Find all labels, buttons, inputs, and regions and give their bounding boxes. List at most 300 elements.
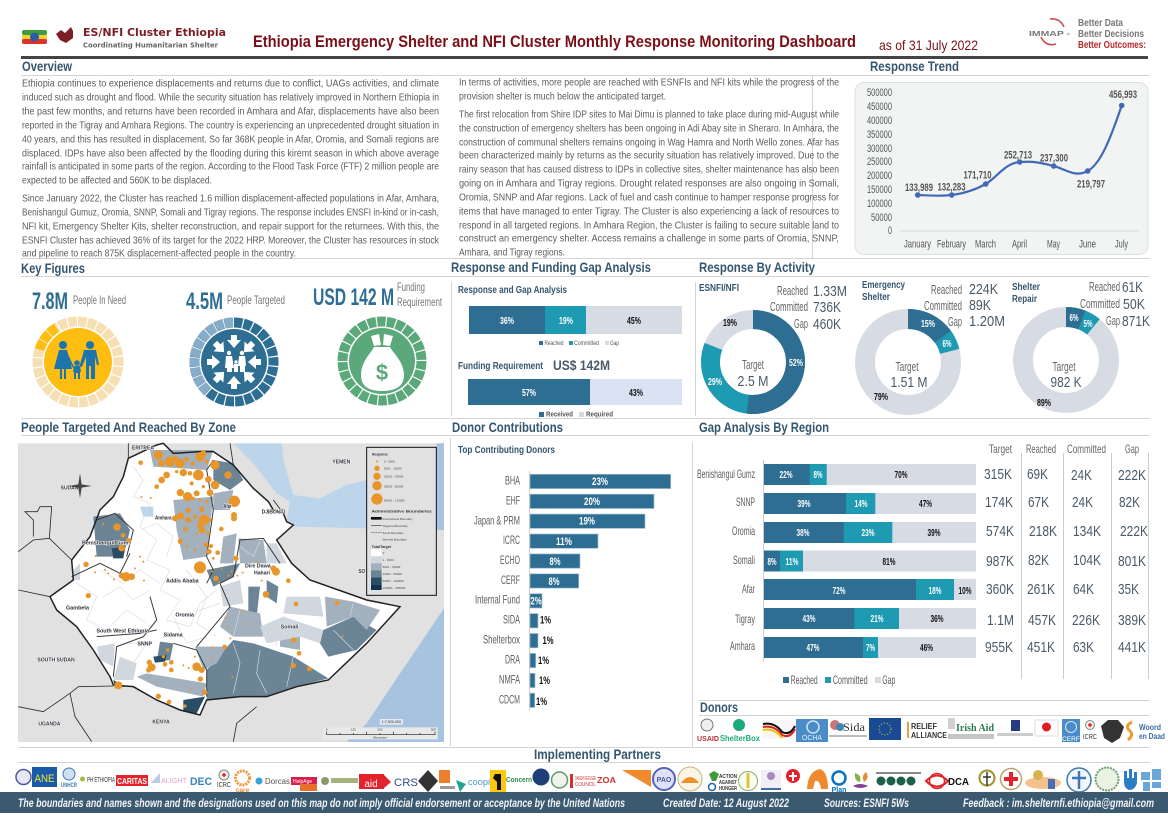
bar chart: top contributing donors: 11%: [556, 536, 572, 548]
map place labels: South West Ethiopia: [96, 629, 150, 635]
map place labels: SOUTH SUDAN: [37, 658, 75, 664]
logo: Sida: Sida: [843, 720, 866, 734]
key figure: people targeted: 4.5M: [186, 288, 223, 315]
table: regional values: 315K: [984, 466, 1012, 483]
stacked bar chart: gap analysis by region: 7%: [866, 643, 875, 654]
table: regional values: 574K: [986, 523, 1014, 540]
donut: Shelter Repair: Reached: [1089, 280, 1120, 294]
donut: Emergency Shelter: 6%: [942, 339, 952, 350]
map legend: TotalTarget: [372, 545, 392, 549]
logo: Plan: [832, 772, 846, 794]
donut: ESNFI/NFI: 19%: [723, 318, 737, 329]
line chart: response trend: July: [1115, 238, 1128, 250]
stacked bar chart: gap analysis by region: 22%: [780, 470, 793, 481]
chart: funding requirement: US$ 142M: [553, 357, 610, 373]
donut: Emergency Shelter: 89K: [969, 297, 991, 314]
logo: USAID: [697, 719, 719, 743]
stacked bar chart: gap analysis by region: [697, 460, 976, 687]
heading: Response Trend: Response Trend: [870, 58, 959, 74]
logo: Alight: ALIGHT: [161, 778, 188, 785]
donut: ESNFI/NFI: 460K: [813, 316, 841, 333]
table: regional values: 63K: [1073, 639, 1094, 656]
logo: Plan: Plan: [832, 787, 846, 794]
stacked bar chart: gap analysis by region: Tigray: [735, 612, 755, 626]
chart: response and gap analysis: Response and Gap Analysis: [458, 285, 567, 296]
logo: diamond: [418, 770, 438, 792]
logo: PAO: [653, 768, 675, 790]
heading: Donors: Donors: [700, 699, 738, 715]
logo: Japan: [1035, 720, 1058, 736]
table: regional values: 82K: [1119, 494, 1140, 511]
line chart: response trend: January: [904, 238, 931, 250]
footer bar: Sources: ESNFI 5Ws: [824, 798, 909, 810]
chart: response and gap analysis: 36%: [500, 316, 514, 327]
chart legend: [783, 673, 895, 687]
line chart: response trend: 200000: [867, 170, 892, 182]
bar chart: top contributing donors: Top Contributing Donors: [458, 445, 555, 456]
donut: Emergency Shelter: 15%: [921, 319, 935, 330]
map place labels: DJIBOUTI: [262, 510, 285, 516]
table: regional values: 35K: [1118, 581, 1139, 598]
donut: ESNFI/NFI: 29%: [708, 377, 722, 388]
donut: Shelter Repair: [1012, 279, 1150, 409]
overview text column 1: NFI kit, Emergency Shelter Kits, shelter reconstruction, and repair support for the returnees. With this, the: [22, 220, 439, 232]
bar chart: top contributing donors: 20%: [584, 496, 600, 508]
map place labels: Oromia: [175, 613, 195, 619]
bar chart: top contributing donors: 23%: [592, 476, 608, 488]
map boundaries: [77, 467, 353, 693]
heading: Implementing Partners: Implementing Partners: [534, 746, 661, 762]
chart legend: Committed: [833, 673, 868, 687]
donut: ESNFI/NFI: ESNFI/NFI: [699, 283, 739, 294]
line chart: response trend: 500000: [867, 87, 892, 99]
logo: Woord en Daad: [1127, 722, 1165, 741]
table: regional values: Committed: [1067, 442, 1106, 456]
logo: CERF: CERF: [1062, 736, 1080, 743]
icon: Ethiopia flag: [22, 30, 47, 44]
logo: iMMAP: Better Decisions: [1078, 29, 1144, 40]
table: regional values: 222K: [1118, 467, 1146, 484]
logo: partner globe: [16, 770, 31, 784]
map place labels: Gambela: [66, 606, 90, 612]
donut: Shelter Repair: Repair: [1012, 294, 1037, 305]
line chart: response trend: 171,710: [964, 170, 992, 182]
map response dots: [83, 450, 344, 708]
logo: iMMAP: IMMAP -: [1029, 31, 1071, 38]
logo: Save the Children: [786, 769, 800, 783]
map place labels: Dire Dawa: [245, 564, 271, 570]
logo: Mercy aid: [359, 774, 391, 790]
logo: UNHCR: UNHCR: [61, 783, 77, 789]
overview text column 2: rainy season that has caused distress to IDPs in collective sites, shelter maintenance has also been: [459, 164, 839, 176]
stacked bar chart: gap analysis by region: Afar: [742, 582, 755, 596]
donut: ESNFI/NFI: Reached: [777, 284, 808, 298]
logo: Norway ministry: [997, 720, 1033, 736]
line chart: response trend: 100000: [867, 198, 892, 210]
logo: ASTED: [532, 768, 550, 786]
logo: orange arch: [807, 769, 828, 789]
chart: response and gap analysis: 45%: [627, 316, 641, 327]
heading: People Targeted And Reached By Zone: People Targeted And Reached By Zone: [21, 419, 236, 435]
donut: Emergency Shelter: Emergency: [862, 280, 905, 291]
logo: Relief Alliance: [907, 722, 948, 740]
chart: response and gap analysis: 19%: [559, 316, 573, 327]
overview text column 1: the past few months, and returns have been recorded in Amhara and Afar, displacements have also been: [22, 106, 439, 118]
overview text column 1: ESNFI Cluster has achieved 36% of its target for the 2022 HRP. Moreover, the Cluster has resources in stock: [22, 234, 440, 246]
table: regional values: 457K: [1028, 612, 1056, 629]
logo: orange triangle: [622, 770, 651, 787]
logo: USAID: USAID: [697, 736, 719, 743]
map legend: 15001 - 50000: [383, 572, 402, 576]
table: regional values: Gap: [1125, 442, 1139, 456]
logo: European Union: [869, 718, 901, 740]
line chart: response trend: February: [937, 238, 966, 250]
logo: ShelterBox: [720, 719, 761, 743]
stacked bar chart: gap analysis by region: 18%: [928, 586, 942, 597]
overview text column 1: expected to be affected and 560K to be displaced.: [22, 174, 212, 186]
line chart: response trend: June: [1079, 238, 1096, 250]
overview text column 1: Since January 2022, the Cluster has reached 1.6 million displacement-affected populations in Afar, Amhara,: [22, 192, 439, 204]
map place labels: Hahari: [254, 571, 270, 577]
footer bar: Created Date: 12 August 2022: [663, 798, 789, 810]
table: regional values: 389K: [1118, 612, 1146, 629]
table: regional values: 218K: [1029, 523, 1057, 540]
map sea areas: [233, 443, 444, 742]
bar chart: top contributing donors: NMFA: [499, 672, 520, 686]
icon: people targeted ring: [178, 306, 290, 418]
line chart: response trend: 150000: [867, 184, 892, 196]
donut: Shelter Repair: 982 K: [1050, 374, 1082, 391]
map place labels: Addis Ababa: [166, 579, 199, 585]
donut: ESNFI/NFI: 1.33M: [813, 283, 847, 300]
line chart: response trend: 450000: [867, 101, 892, 113]
logo: UNHCR: [61, 768, 77, 789]
logo: orange partner group: [1025, 770, 1061, 789]
table: regional values: 222K: [1120, 523, 1148, 540]
chart: response and gap analysis: Gap: [610, 341, 620, 347]
map place labels: [37, 446, 366, 728]
logo: dark green circles: [876, 772, 921, 786]
overview text column 2: going on in Amhara and Tigray regions. Drought related responses are also ongoing in Somali,: [459, 178, 839, 190]
map scale bar: 125: [351, 728, 356, 732]
icon: money bag ring: $: [376, 360, 388, 385]
logo: OCHA: [796, 719, 828, 742]
map legend: 0 - 5000: [384, 460, 395, 464]
logo: PH Ethiopia: PH ETHIOPIA: [87, 777, 115, 784]
donut: Shelter Repair: 50K: [1123, 296, 1145, 313]
key figure: people in need: People In Need: [73, 293, 126, 307]
map legend: 0: [383, 551, 385, 555]
logo: ICRC partner: [217, 770, 231, 789]
table: regional values: 451K: [1027, 639, 1055, 656]
bar chart: top contributing donors: 19%: [579, 516, 595, 528]
logo: HelpAge: HelpAge: [293, 779, 312, 785]
cluster name: [83, 26, 226, 50]
overview text column 1: induced such as drought and flood. While the security situation has relatively improved in Northern Ethiopia in: [22, 92, 439, 104]
heading: Key Figures: Key Figures: [21, 260, 85, 276]
stacked bar chart: gap analysis by region: 8%: [814, 470, 823, 481]
donut: Emergency Shelter: Reached: [931, 283, 962, 297]
map legend: 100001 - 265000: [383, 586, 406, 590]
map legend: Zonal Boundary: [383, 531, 404, 535]
donut: Shelter Repair: Gap: [1106, 314, 1120, 328]
key figure: people targeted: People Targeted: [227, 293, 285, 307]
logo: DRC: COUNCIL: [575, 782, 596, 788]
heading: Overview: Overview: [22, 58, 72, 74]
chart: response and gap analysis: Committed: [574, 341, 599, 347]
logo: purple partner: [761, 770, 781, 790]
map place labels: Benishangul Gum.: [82, 541, 130, 547]
table: regional values: 24K: [1072, 494, 1093, 511]
map place labels: Sidama: [164, 633, 183, 639]
logo: ANE: ANE: [34, 773, 54, 785]
stacked bar chart: gap analysis by region: 38%: [796, 528, 810, 539]
overview text column 2: Oromia, SNNP and Afar regions. Lack of fuel and cash continue to hamper response progress for: [459, 192, 839, 204]
logo: Care: [236, 771, 250, 794]
overview text column 2: [459, 76, 839, 258]
donut: ESNFI/NFI: Target: [742, 357, 764, 372]
logo: Concern: Concern: [506, 777, 532, 784]
table: regional values: 104K: [1073, 552, 1101, 569]
chart: funding requirement: [458, 357, 682, 418]
logo: Relief Alliance: RELIEF: [911, 722, 937, 731]
donut: Emergency Shelter: Committed: [924, 299, 962, 313]
bar chart: top contributing donors: ICRC: [503, 533, 520, 547]
donut: ESNFI/NFI: 2.5 M: [738, 373, 768, 390]
donut: ESNFI/NFI: 52%: [789, 358, 803, 369]
logo: IRC: [490, 770, 506, 794]
map legend: 5001 - 15000: [384, 467, 402, 471]
date: as of 31 July 2022: [879, 37, 978, 53]
overview text column 2: Amhara, and Tigray regions.: [459, 246, 565, 258]
stacked bar chart: gap analysis by region: 39%: [928, 528, 941, 539]
donut: Shelter Repair: 871K: [1122, 313, 1150, 330]
heading: Donor Contributions: Donor Contributions: [452, 419, 563, 435]
donut: ESNFI/NFI: 736K: [813, 299, 841, 316]
map legend: Response: [372, 453, 388, 457]
map scale bar: Kilometers: [373, 736, 388, 740]
bar chart: top contributing donors: 1%: [542, 635, 554, 647]
chart: funding requirement: 43%: [629, 388, 643, 399]
bar chart: top contributing donors: 8%: [548, 576, 560, 588]
stacked bar chart: gap analysis by region: 14%: [854, 499, 868, 510]
map place labels: SUDAN: [61, 486, 78, 492]
stacked bar chart: gap analysis by region: Benishangul Gumz: [697, 467, 755, 481]
icon: family in yellow ring: [27, 311, 129, 413]
logo: Mercy aid: aid: [364, 779, 378, 790]
donut: Shelter Repair: 5%: [1084, 319, 1093, 330]
logo: DEC: DEC: [190, 776, 212, 788]
overview text column 2: construct an emergency shelter. Access remains a challenge in some parts of Oromia, SNNP,: [459, 232, 839, 244]
bar chart: top contributing donors: SIDA: [503, 612, 520, 626]
donut: Shelter Repair: 89%: [1037, 398, 1051, 409]
map legend: 50001 - 100000: [383, 579, 404, 583]
map place labels: UGANDA: [38, 722, 60, 728]
overview text column 1: reported in the Tigray and Amhara Regions. The country is experiencing an unprecedented drought situation in: [22, 120, 439, 132]
logo: red cross: [1000, 768, 1022, 790]
logo: green partner: [321, 777, 358, 785]
map place labels: Somali: [281, 625, 299, 631]
icon: money bag ring: [342, 322, 422, 400]
map scale bar: 250: [378, 728, 383, 732]
donut: ESNFI/NFI: [699, 283, 847, 404]
bar chart: top contributing donors: Japan & PRM: [474, 514, 520, 528]
stacked bar chart: gap analysis by region: SNNP: [736, 495, 755, 509]
table: regional values: 69K: [1027, 466, 1048, 483]
logo: ICRC: [1083, 720, 1097, 741]
stacked bar chart: gap analysis by region: Somali: [733, 553, 755, 567]
logo: Caritas: CARITAS: [117, 776, 147, 786]
donut: Emergency Shelter: Gap: [948, 315, 962, 329]
logo: German cooperation: [762, 720, 795, 739]
map legend: [367, 447, 436, 595]
table: regional values: 82K: [1028, 552, 1049, 569]
logo: DCA: DCA: [948, 777, 969, 788]
stacked bar chart: gap analysis by region: Oromia: [732, 524, 755, 538]
overview text column 1: Ethiopia continues to experience displacements and returns due to conflict, UAGs activities, and climate: [22, 78, 439, 90]
logo: CERF: [1062, 719, 1080, 743]
overview text column 2: In terms of activities, more people are reached with ESNFIs and NFI kits while the progress of the: [459, 76, 839, 88]
logo: leaves: [853, 772, 868, 788]
stacked bar chart: gap analysis by region: 72%: [832, 586, 846, 597]
donut: Emergency Shelter: Shelter: [862, 292, 890, 303]
map place labels: SNNP: [137, 642, 152, 648]
implementing partner logos: [16, 767, 1161, 794]
map scale bar: 500: [431, 728, 436, 732]
logo: UK crest: [1101, 720, 1124, 743]
map place labels: YEMEN: [332, 460, 350, 466]
map legend: 15001 - 30000: [384, 475, 404, 479]
donut: Emergency Shelter: 79%: [874, 392, 888, 403]
overview text column 2: items that have managed to enter Tigray. The Cluster is also experiencing a lack of resources to: [459, 206, 839, 218]
line chart: response trend: 350000: [867, 129, 892, 141]
overview text column 2: construction of communal shelters remains ongoing in Wag Hamra and North Wello zones. Afar has: [459, 136, 839, 148]
donut: Shelter Repair: 6%: [1070, 313, 1079, 324]
stacked bar chart: gap analysis by region: 46%: [920, 643, 933, 654]
logo: Irish Aid: [948, 718, 994, 739]
logo: CRS: CRS: [394, 777, 418, 789]
logo: iMMAP: Better Outcomes:: [1078, 40, 1146, 51]
line chart: response trend: 133,989: [905, 182, 933, 194]
table: regional values: 64K: [1073, 581, 1094, 598]
line chart: response trend: 237,300: [1040, 152, 1068, 164]
overview text column 2: been characterized mainly by returns as the security situation has relatively improved. Due to the: [459, 150, 839, 162]
cluster name: Coordinating Humanitarian Shelter: [83, 42, 219, 50]
bar chart: top contributing donors: EHF: [506, 494, 520, 508]
chart: funding requirement: Received: [546, 412, 573, 418]
logo: OSAT: [552, 772, 568, 788]
heading: Response and Funding Gap Analysis: Response and Funding Gap Analysis: [451, 259, 651, 275]
bar chart: top contributing donors: CDCM: [499, 692, 520, 706]
logo: Sida: [829, 720, 867, 737]
implementing partner logos: DANISH REFUGEE: [575, 776, 596, 782]
cluster name: ES/NFI Cluster Ethiopia: [83, 26, 226, 39]
logo: iMMAP: Better Data: [1078, 18, 1123, 29]
overview text column 2: the construction of emergency shelters has been ongoing in Adi Abay site in Sheraro. In Amhara, the: [459, 122, 839, 134]
logo: green seal: [1096, 768, 1118, 790]
bar chart: top contributing donors: 2%: [530, 596, 542, 608]
donut: Shelter Repair: 61K: [1122, 279, 1143, 296]
key figure: people in need: 7.8M: [32, 288, 68, 315]
logo: Relief Alliance: ALLIANCE: [911, 731, 948, 740]
table: regional values: 261K: [1027, 581, 1055, 598]
table: regional values: 174K: [985, 494, 1013, 511]
map legend: International Boundary: [383, 517, 413, 521]
line chart: response trend: 219,797: [1077, 178, 1105, 190]
overview text column 1: displaced. IDPs have also been affected by the flooding during this kiremt season in which above average: [22, 148, 439, 160]
overview text column 2: The first relocation from Shire IDP sites to Mai Dimu is planned to take place during mid-August while: [459, 108, 839, 120]
chart legend: Reached: [791, 673, 818, 687]
line chart: response trend: 132,283: [938, 182, 966, 194]
logo: blue cross: [1067, 768, 1091, 792]
line chart: response trend: 456,993: [1109, 89, 1137, 101]
overview text column 1: rainfall is anticipated in some parts of the region. According to the Flood Task Force (FTF) 2 million people are: [22, 160, 439, 172]
line chart: response trend: May: [1047, 238, 1060, 250]
donut: Emergency Shelter: 1.51 M: [890, 374, 928, 391]
map place labels: Amhara: [155, 516, 172, 522]
donut: Shelter Repair: Committed: [1080, 297, 1120, 311]
logo: blue hand: [1124, 769, 1137, 790]
map scale bar: [323, 719, 438, 740]
logo: OCHA: OCHA: [802, 735, 822, 742]
stacked bar chart: gap analysis by region: 43%: [802, 614, 816, 625]
chart: response and gap analysis: [458, 285, 682, 347]
bar chart: top contributing donors: 1%: [539, 675, 550, 687]
table: regional values: 24K: [1071, 467, 1092, 484]
table: regional values: 987K: [986, 553, 1014, 570]
logo: Action Against Hunger: HUNGER: [719, 786, 737, 792]
map legend: 5001 - 15000: [383, 565, 401, 569]
overview text column 2: respond in all targeted regions. In Amhara Region, the Cluster is failing to secure suitable land to: [459, 220, 839, 232]
logo: Care: care: [236, 787, 250, 794]
line chart: response trend: 250000: [867, 156, 892, 168]
stacked bar chart: gap analysis by region: 70%: [894, 470, 908, 481]
overview text column 1: [22, 78, 440, 260]
donut: ESNFI/NFI: Committed: [770, 300, 808, 314]
logo: Dorcas: Dorcas: [265, 777, 290, 786]
logo: ICRC partner: ICRC: [217, 782, 231, 789]
bar chart: top contributing donors: DRA: [505, 652, 520, 666]
chart: funding requirement: Funding Requirement: [458, 361, 544, 372]
stacked bar chart: gap analysis by region: 47%: [919, 499, 932, 510]
map choropleth zones: [93, 460, 377, 700]
key figure: people in need: [32, 288, 126, 315]
footer bar: [0, 792, 1168, 813]
logo: DRC: [570, 774, 596, 788]
logo: ShelterBox: ShelterBox: [720, 734, 761, 743]
bar chart: top contributing donors: BHA: [505, 474, 520, 488]
logo: Action Against Hunger: ACTION: [719, 774, 737, 780]
line chart: response trend: March: [975, 238, 996, 250]
stacked bar chart: gap analysis by region: 81%: [882, 557, 896, 568]
logo: DCA: [926, 774, 969, 788]
stacked bar chart: gap analysis by region: 10%: [958, 586, 972, 597]
logo: PH Ethiopia: [80, 776, 115, 784]
title: Ethiopia Emergency Shelter and NFI Cluster Monthly Response Monitoring Dashboard: [253, 32, 856, 51]
logo: NRC: [439, 770, 455, 789]
donut: Emergency Shelter: 1.20M: [969, 313, 1005, 330]
stacked bar chart: gap analysis by region: 21%: [870, 614, 884, 625]
donut: ESNFI/NFI: Gap: [794, 317, 808, 331]
chart: funding requirement: 57%: [522, 388, 536, 399]
footer bar: The boundaries and names shown and the designations used on this map do not imply official endorsement or acceptance by the United Nations: [18, 798, 625, 810]
logo: cross partner: [980, 770, 994, 786]
key figure: funding requirement: Requirement: [397, 295, 442, 309]
overview text column 1: and pipeline to reach 875K displacement-affected people in the country.: [22, 248, 296, 260]
map legend: Woreda Boundary: [383, 538, 407, 542]
table: regional values: 226K: [1072, 612, 1100, 629]
map legend: Administrative Boundaries: [372, 509, 433, 514]
